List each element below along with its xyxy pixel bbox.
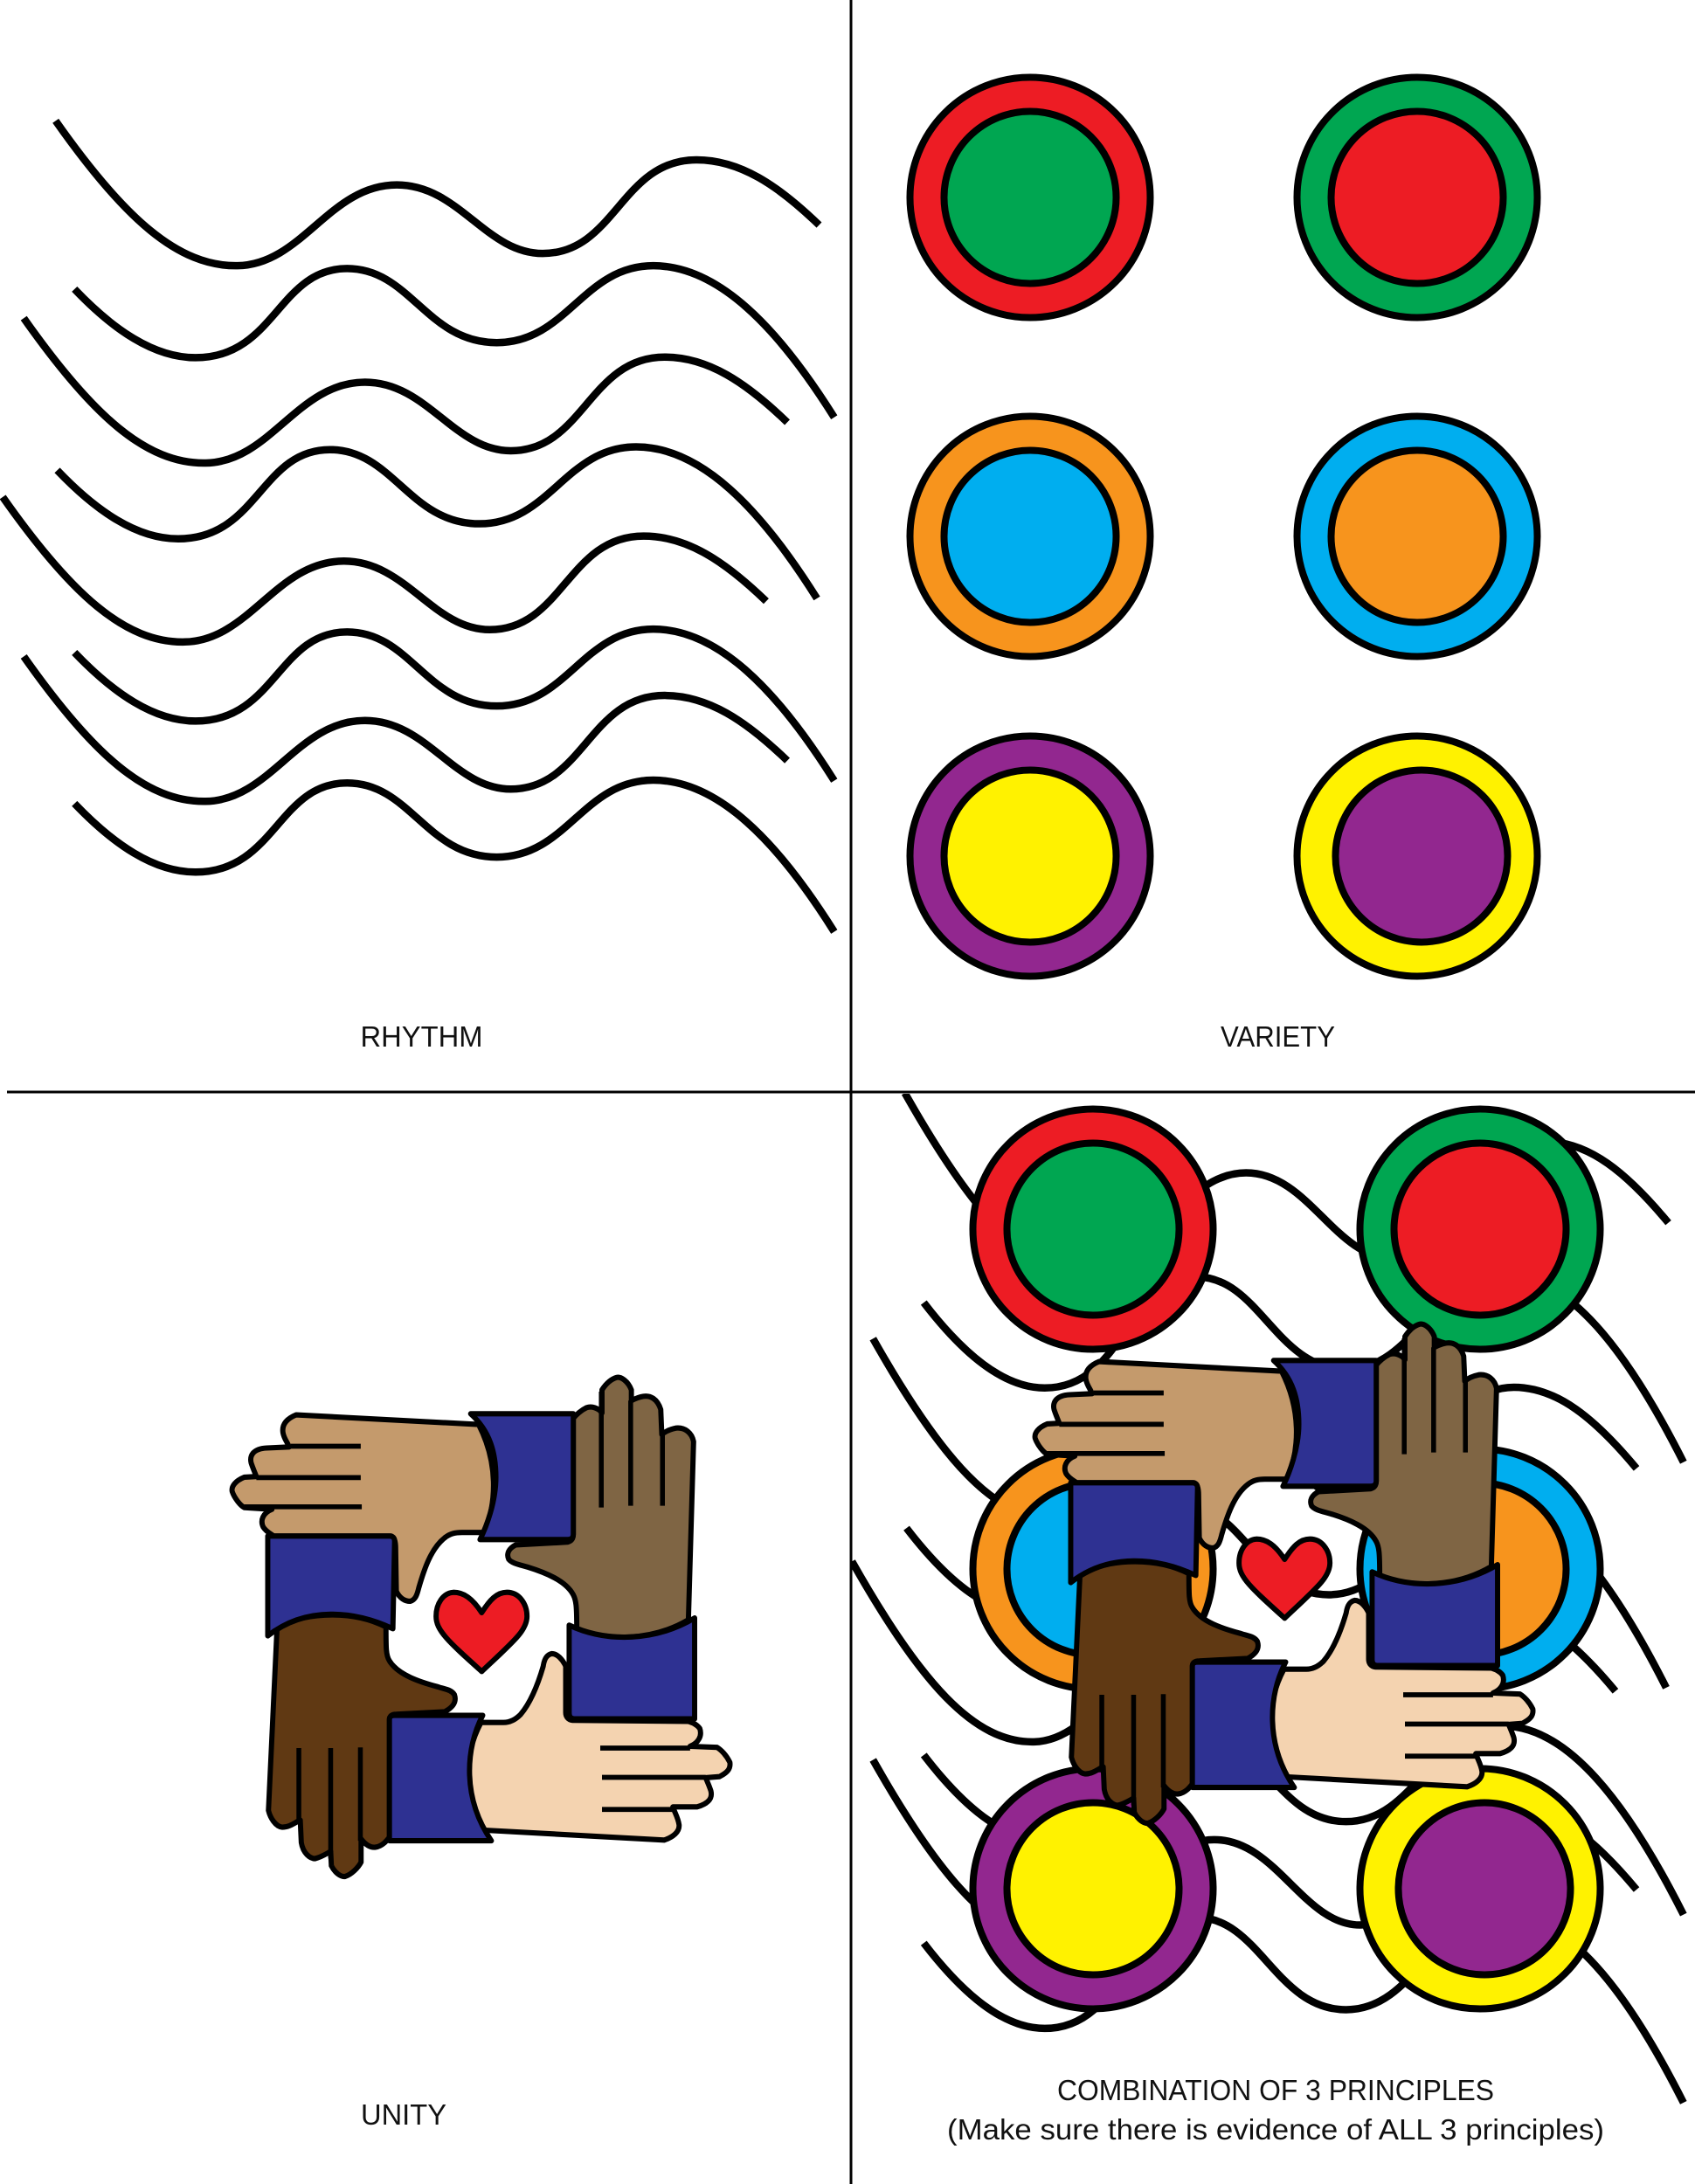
- label: combination: [947, 2074, 1604, 2146]
- panel: combination hands: [1035, 1324, 1533, 1823]
- label: variety: VARIETY: [1221, 1020, 1335, 1053]
- panel: rhythm waves: [3, 121, 834, 932]
- label: combination: COMBINATION OF 3 PRINCIPLES: [1057, 2074, 1494, 2106]
- label: rhythm: RHYTHM: [360, 1020, 482, 1053]
- label: combination: (Make sure there is evidence of ALL 3 principles): [947, 2113, 1604, 2146]
- panel: unity hands: [232, 1378, 730, 1876]
- panel: combination circles: [973, 1109, 1601, 2009]
- panel: combination waves: [852, 1093, 1684, 2103]
- label: unity: UNITY: [361, 2098, 446, 2131]
- panel: variety circles: [910, 77, 1538, 977]
